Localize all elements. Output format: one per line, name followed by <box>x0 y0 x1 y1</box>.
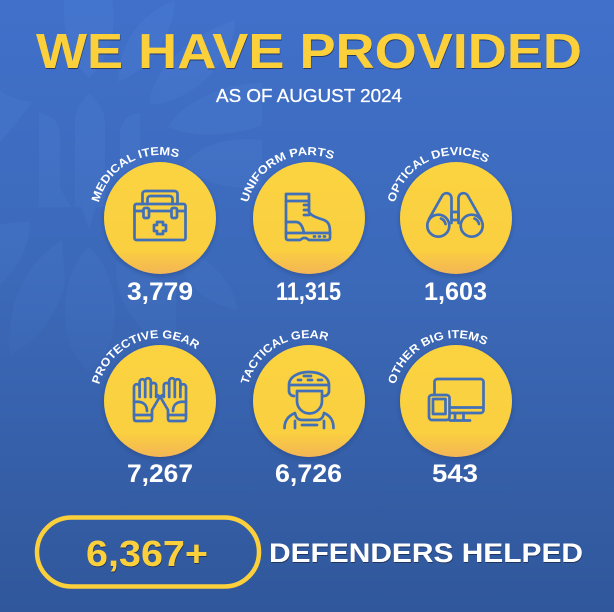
label: medical items: MEDICAL ITEMS <box>91 146 179 202</box>
icon: soldier <box>284 372 334 428</box>
pill outline <box>37 518 259 586</box>
circle <box>104 345 216 457</box>
icon: gloves <box>134 378 186 421</box>
stat: other big items <box>388 330 513 488</box>
stat: medical items <box>91 146 217 306</box>
value: 7,267 <box>127 460 193 488</box>
label: optical devices: OPTICAL DEVICES <box>388 147 489 202</box>
label: other big items: OTHER BIG ITEMS <box>388 330 488 384</box>
value: 6,726 <box>275 460 342 488</box>
icon: monitor and tablet <box>429 379 484 420</box>
stat: protective gear <box>92 330 217 488</box>
stat: optical devices <box>388 147 513 306</box>
label: protective gear: PROTECTIVE GEAR <box>92 330 200 384</box>
subtitle: AS OF AUGUST 2024 <box>216 86 402 106</box>
circle <box>104 162 216 274</box>
circle <box>400 345 512 457</box>
icon: first aid kit <box>134 191 186 240</box>
icon: boot <box>286 194 330 240</box>
value: 11,315 <box>276 278 341 306</box>
total number: 6,367+ <box>86 533 208 574</box>
value: 543 <box>432 460 478 488</box>
background emblem: wreath and trident <box>0 0 262 372</box>
title: WE HAVE PROVIDED <box>36 25 582 79</box>
label: uniform parts: UNIFORM PARTS <box>240 147 334 202</box>
value: 3,779 <box>127 278 193 306</box>
label: tactical gear: TACTICAL GEAR <box>240 330 328 382</box>
circle <box>400 162 512 274</box>
stat: uniform parts <box>240 147 366 306</box>
total caption: DEFENDERS HELPED <box>269 538 583 568</box>
icon: binoculars <box>427 193 483 237</box>
value: 1,603 <box>424 278 487 306</box>
stat: tactical gear <box>240 330 366 488</box>
circle <box>253 345 365 457</box>
circle <box>253 162 365 274</box>
